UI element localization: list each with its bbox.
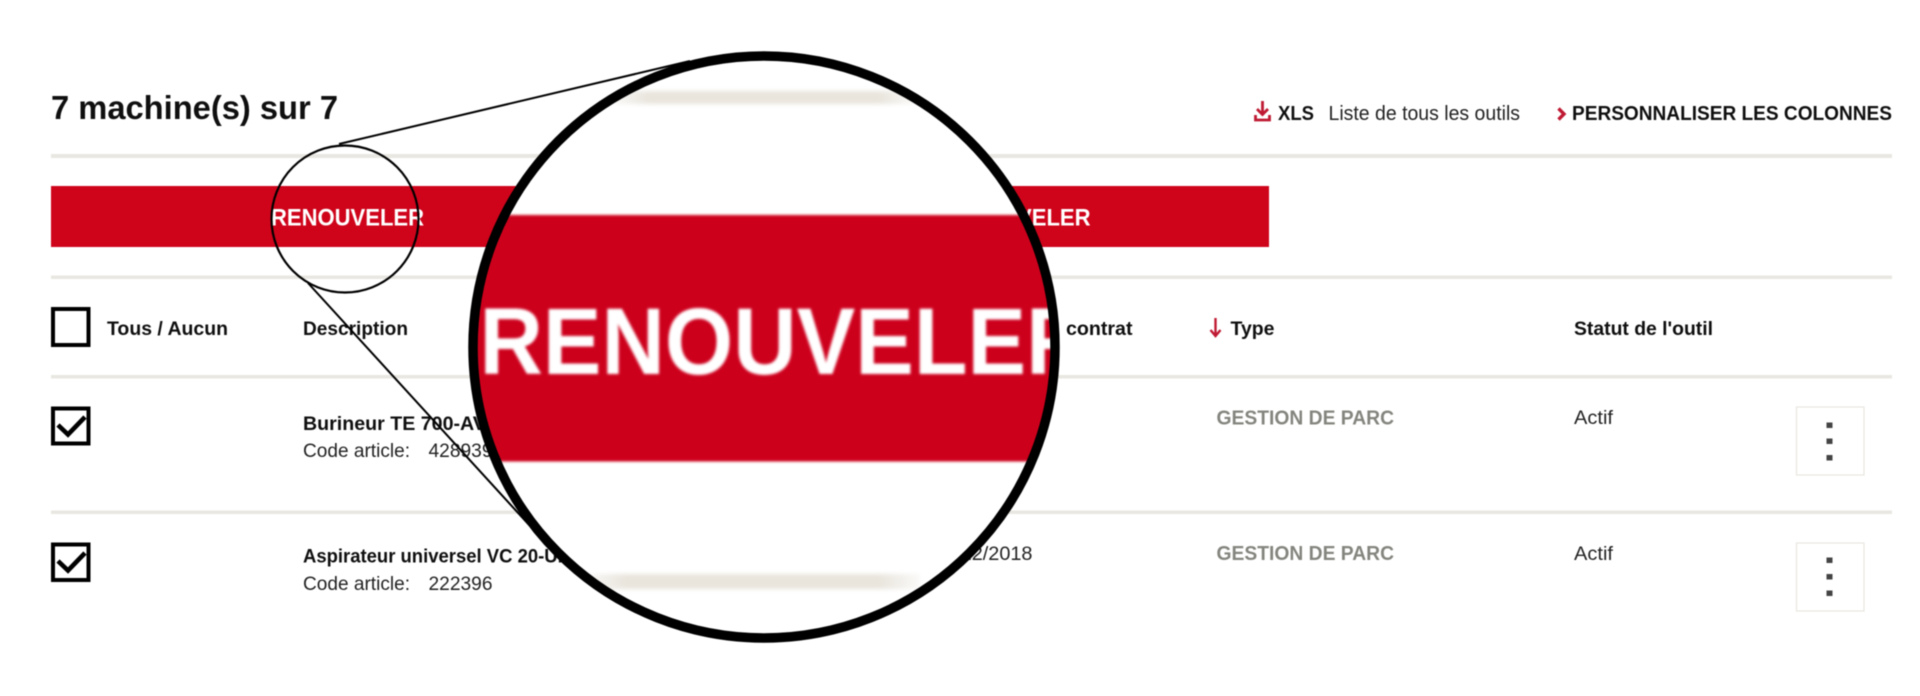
article code: Code article: [303,573,410,595]
contract column header end: contrat [1066,318,1133,340]
customise columns link: PERSONNALISER LES COLONNES [1572,102,1892,125]
article code value: 222396 [428,573,492,595]
date value: 02/12/2018 [933,543,1032,565]
icon: download [1256,101,1270,120]
status value: Actif [1574,543,1614,565]
checkbox: select all [53,309,88,345]
magnified red bar [440,215,1090,462]
magnifier connector lines [308,61,690,526]
magnified action label: RENOUVELER [480,289,1090,395]
action label right: RENOUVELER [938,204,1090,232]
actions menu button [1796,543,1864,611]
actions menu button [1796,407,1864,475]
action label left: RENOUVELER [271,204,424,232]
icon: chevron [1558,108,1564,120]
type value: GESTION DE PARC [1216,408,1394,430]
product name: Aspirateur universel VC 20-UM [303,546,573,568]
article code value: 428939 [428,440,492,462]
icon: sort arrow [1210,318,1220,336]
red action bar [51,186,1269,247]
table header row [53,309,1713,345]
toolbar: export and column links [1256,101,1892,125]
table row 2 [53,543,1864,611]
magnified top divider [612,91,916,104]
product name: Burineur TE 700-AVR [303,413,500,435]
status column header: Statut de l'outil [1574,318,1713,340]
checkbox checked [53,544,88,580]
title: 7 machine(s) sur 7 [51,90,338,127]
article code: Code article: [303,440,410,462]
type column header: Type [1230,318,1275,340]
list of tools label: Liste de tous les outils [1328,102,1520,125]
contract column header start: Date de fin de [907,318,1035,340]
lens contents [440,91,1090,589]
status value: Actif [1574,407,1614,429]
small focus circle [272,146,418,292]
checkbox checked [53,408,88,444]
lens rim [473,56,1055,638]
select all label: Tous / Aucun [107,318,228,340]
table row 1 [53,407,1864,475]
big magnifier lens [440,56,1090,638]
magnified bottom divider [585,574,920,589]
type value: GESTION DE PARC [1216,543,1394,565]
table dividers [51,154,1892,514]
XLS label: XLS [1278,102,1314,125]
description column header: Description [303,318,408,340]
